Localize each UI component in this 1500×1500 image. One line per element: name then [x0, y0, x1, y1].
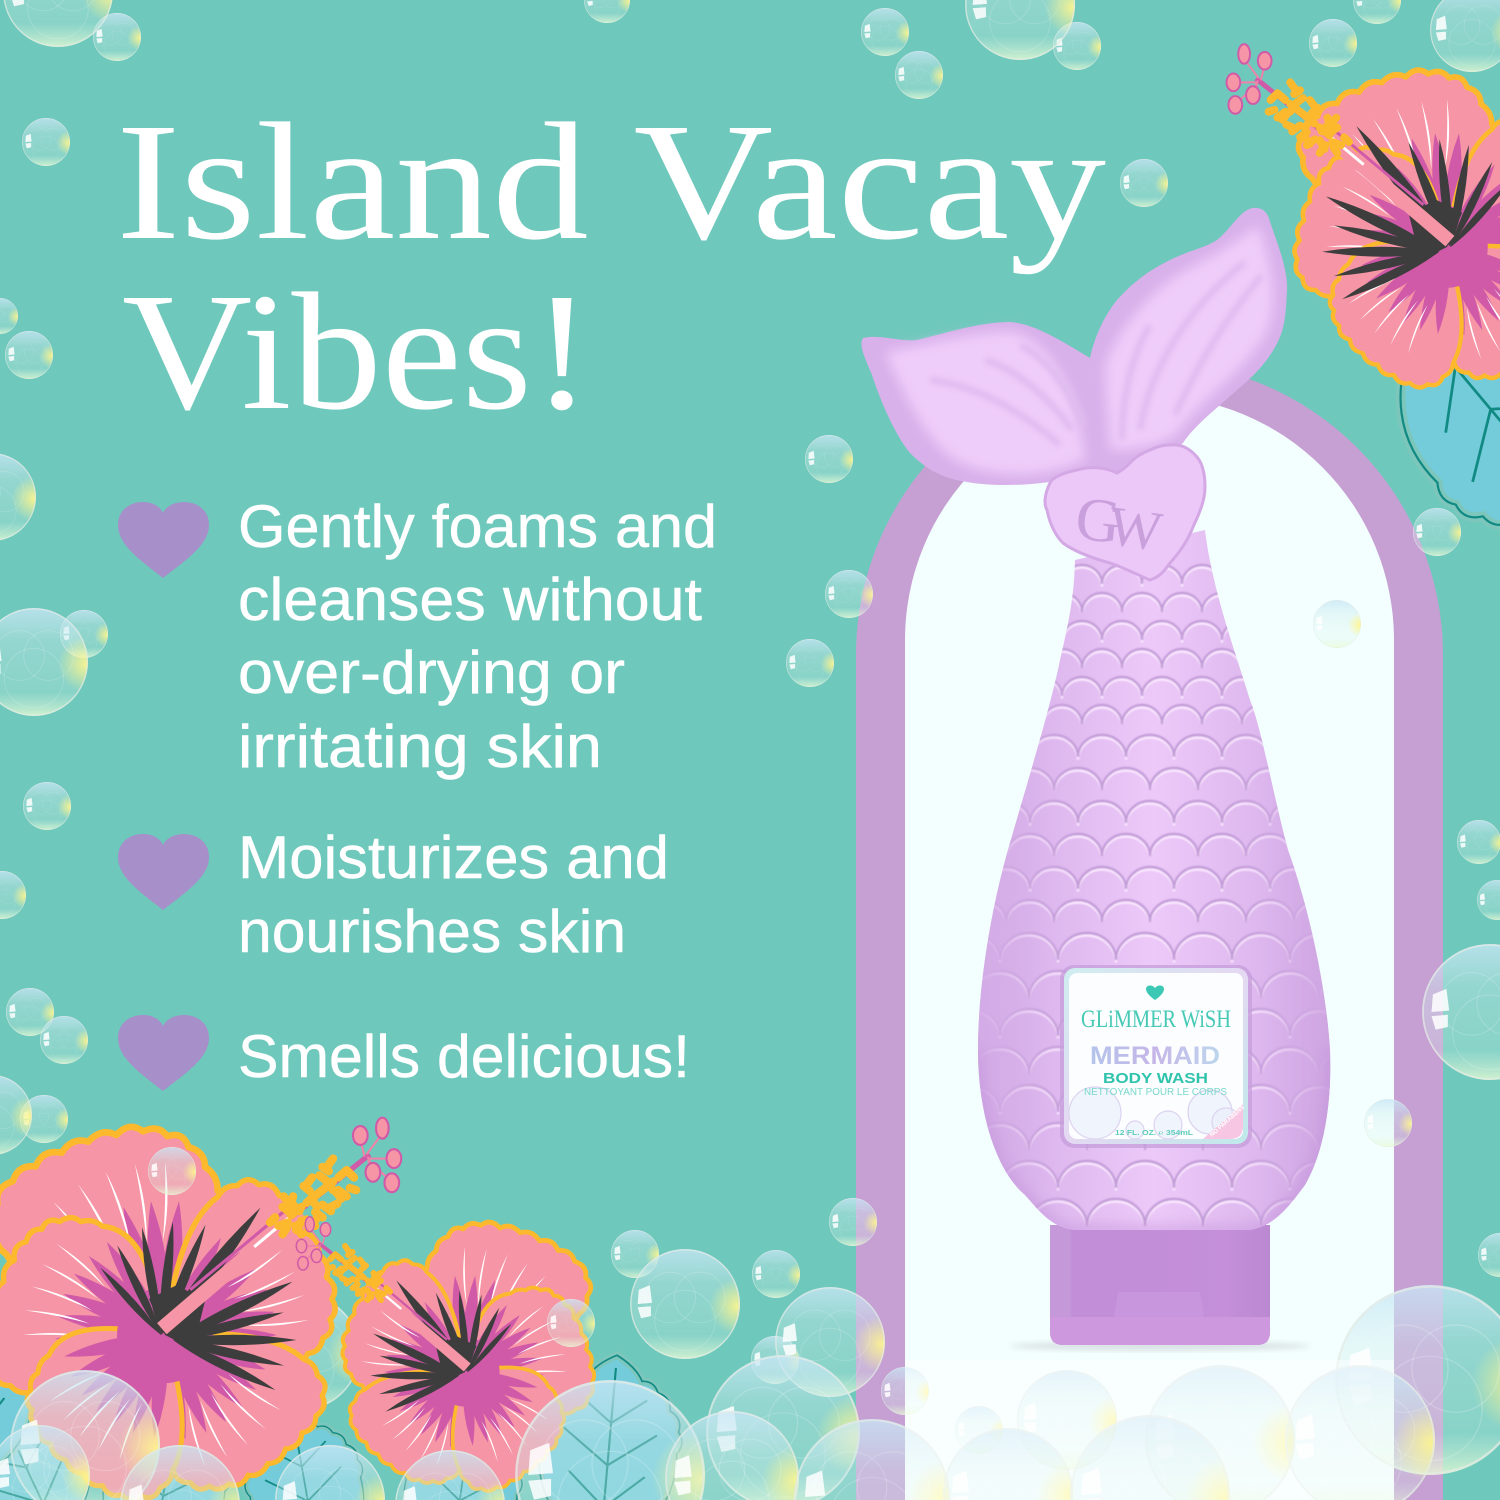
bottle: [861, 208, 1340, 1351]
leaves along bottom edge: [0, 1351, 683, 1500]
bullet two: moisturizes: [118, 824, 669, 965]
text: moisturizes: [238, 824, 669, 965]
french subtitle: NETTOYANT POUR LE CORPS: [1084, 1087, 1227, 1098]
heart emblem with monogram: [1045, 445, 1205, 580]
product name: MERMAID: [1090, 1042, 1220, 1070]
icon: heart one: [118, 502, 209, 578]
right fin: [1090, 208, 1287, 480]
title: Vibes!: [122, 259, 592, 445]
text: foams and cleanses: irritating skin: [238, 713, 602, 780]
title: Island Vacay: [116, 89, 1106, 275]
bottle tail fins: [861, 208, 1287, 580]
left fin: [861, 322, 1107, 485]
flower: large bottom left: [0, 1103, 401, 1500]
icon: leaf behind top right flower: [1396, 368, 1500, 530]
flower: top right: [1226, 44, 1500, 407]
bullet list: [118, 493, 717, 1091]
label bubbles: [1069, 1087, 1240, 1139]
bottle cap: [1010, 1225, 1310, 1351]
haze softening bubbles inside the arch: [905, 1360, 1394, 1500]
text: foams and cleanses: [238, 493, 717, 780]
flower: small bottom centre: [296, 1205, 609, 1500]
label heart logo: [1146, 985, 1164, 1000]
text: foams and cleanses: Gently foams and: [238, 493, 717, 560]
text: moisturizes: Moisturizes and: [238, 824, 669, 891]
paraben-free corner: NO PARABENS: [1209, 1105, 1246, 1138]
icon: heart two: [118, 834, 209, 910]
text: smells delicious: Smells delicious!: [238, 1023, 690, 1090]
bullet one: foams and cleanses: [118, 493, 717, 780]
brand name: GLiMMER WiSH: [1081, 1006, 1231, 1033]
bottle body with scales: [960, 530, 1340, 1236]
text: foams and cleanses: cleanses without: [238, 566, 702, 633]
volume: 12 FL. OZ. ℮ 354mL: [1115, 1130, 1194, 1137]
bullet three: smells: [118, 1015, 690, 1091]
product label: [1060, 965, 1252, 1148]
bubbles behind flowers: [6, 1156, 360, 1410]
icon: heart three: [118, 1015, 209, 1091]
heart emblem with monogram: G: [1072, 485, 1124, 557]
title: [116, 89, 1106, 445]
body wash: BODY WASH: [1103, 1070, 1208, 1087]
text: moisturizes: nourishes skin: [238, 898, 626, 965]
heart emblem with monogram: W: [1105, 495, 1166, 564]
text: foams and cleanses: over-drying or: [238, 639, 625, 706]
arch frame: [856, 362, 1443, 1500]
